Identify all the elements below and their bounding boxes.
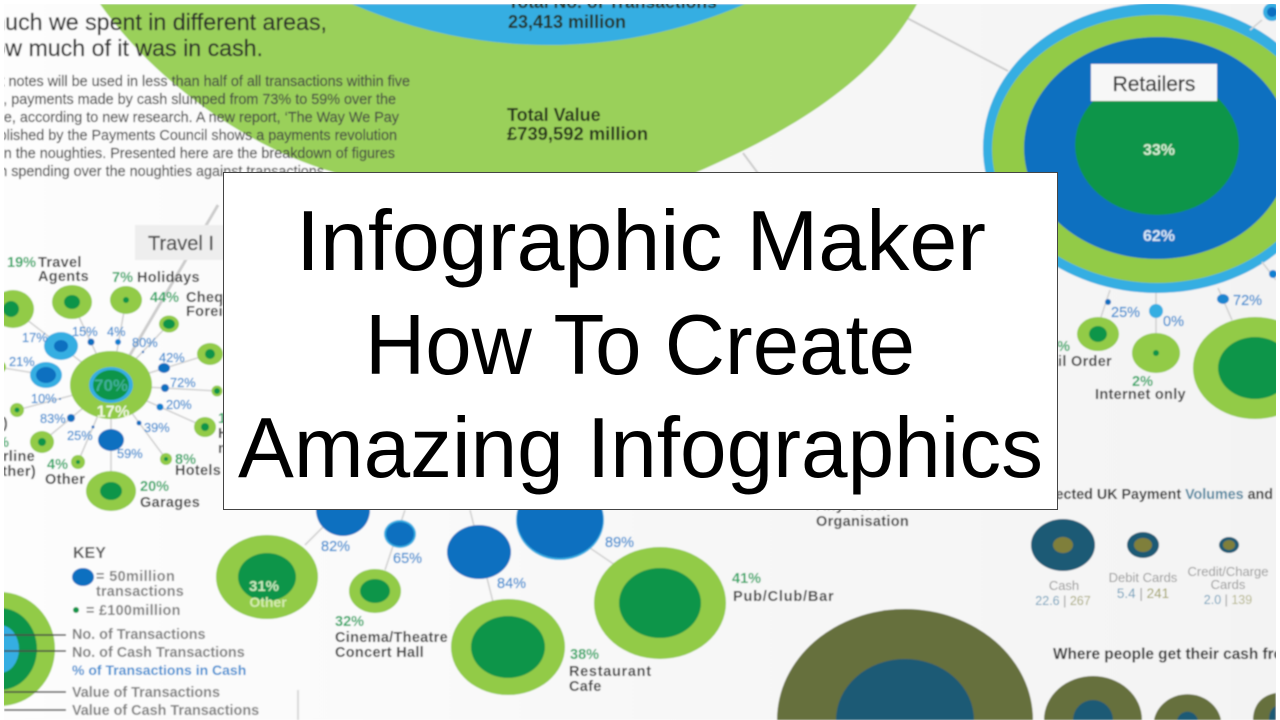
travel cluster labels: 44% xyxy=(150,290,179,306)
payment volumes panel: Debit Cards xyxy=(1109,570,1178,585)
large green circle with total figures xyxy=(100,4,1008,172)
travel cluster bubbles xyxy=(0,285,223,511)
article body text: on spending over the noughties against transactions. xyxy=(0,164,328,180)
other bubble: Other xyxy=(249,594,287,610)
retailer sub-bubbles: Internet only xyxy=(1095,387,1186,403)
retailer sub-bubbles: 0% xyxy=(1163,314,1184,330)
travel cluster labels: 21% xyxy=(9,354,35,369)
payment volumes panel: 22.6 | 267 xyxy=(1035,594,1091,608)
retailer sub-bubbles: 25% xyxy=(1111,305,1140,321)
other bubble xyxy=(216,535,318,619)
article heading xyxy=(4,12,326,58)
large green circle with total figures: Total Value xyxy=(507,105,601,125)
article body text: in the noughties. Presented here are the breakdown of figures xyxy=(1,146,395,162)
spending bubbles: Cinema/Theatre xyxy=(335,630,448,646)
travel cluster bubbles: 17% xyxy=(96,403,130,421)
other bubble: 31% xyxy=(249,578,279,595)
payment volumes panel: Credit/Charge xyxy=(1188,564,1268,579)
spending bubbles: 32% xyxy=(335,614,364,630)
travel cluster labels: 83% xyxy=(40,411,66,426)
article body text xyxy=(0,74,410,180)
travel cluster labels: Travel xyxy=(38,255,82,271)
payment volumes panel: Cash xyxy=(1049,578,1079,593)
travel cluster labels: Cheque xyxy=(186,290,241,306)
travel cluster labels: 19% xyxy=(7,255,36,271)
title line 3: Amazing Infographics xyxy=(238,401,1043,496)
travel cluster labels: 72% xyxy=(170,375,196,390)
travel cluster labels: 39% xyxy=(144,420,170,435)
spending bubbles: 84% xyxy=(497,576,526,592)
key: Value of Transactions xyxy=(72,685,220,701)
travel cluster labels: Foreign xyxy=(186,304,241,320)
travel cluster labels xyxy=(0,255,241,511)
retailer sub-bubbles: 19% xyxy=(1041,339,1070,355)
key: KEY xyxy=(73,545,106,562)
retailers bubble xyxy=(983,3,1280,293)
key: = £100million xyxy=(86,603,181,619)
travel cluster labels: 25% xyxy=(67,428,93,443)
payment volumes panel: Cards xyxy=(1211,577,1246,592)
spending bubbles: Restaurant xyxy=(569,664,652,680)
travel cluster labels: Agents xyxy=(38,269,89,285)
large olive value bubble xyxy=(777,609,1033,720)
large green circle with total figures: 23,413 million xyxy=(508,12,626,32)
travel cluster labels: 8% xyxy=(175,452,196,468)
payment volumes panel: 2.0 | 139 xyxy=(1204,593,1252,607)
travel cluster labels: 20% xyxy=(140,479,169,495)
retailers bubble: 33% xyxy=(1143,142,1175,159)
travel cluster labels: 1% xyxy=(218,411,239,427)
key: No. of Transactions xyxy=(72,627,206,643)
spending bubbles: 41% xyxy=(732,571,761,587)
key xyxy=(0,545,259,719)
travel cluster labels: 20% xyxy=(166,397,192,412)
travel cluster labels: Hotels xyxy=(175,463,221,479)
travel cluster labels: 10% xyxy=(31,391,57,406)
travel label xyxy=(130,205,225,355)
travel cluster labels: 80% xyxy=(132,335,158,350)
retailers bubble: 62% xyxy=(1143,228,1175,245)
key: transactions xyxy=(96,584,184,600)
spending bubbles: Organisation xyxy=(816,514,909,530)
payment volumes panel: Selected UK Payment Volumes and xyxy=(1034,487,1273,503)
spending bubbles: Any Other xyxy=(816,498,889,514)
spending bubbles: 82% xyxy=(321,539,350,555)
travel cluster labels: Garages xyxy=(140,495,200,511)
title line 2: How To Create xyxy=(365,298,915,393)
travel cluster labels: 59% xyxy=(117,446,143,461)
spending bubbles: 65% xyxy=(393,551,422,567)
spending bubbles xyxy=(315,510,909,696)
lower connector lines xyxy=(298,510,615,720)
key: = 50million xyxy=(96,569,175,585)
retailer sub-bubbles: 72% xyxy=(1233,293,1262,309)
travel cluster labels: 17% xyxy=(22,330,48,345)
travel cluster labels: ) xyxy=(3,416,8,432)
travel cluster labels: 4% xyxy=(107,324,126,339)
retailer sub-bubbles: 2% xyxy=(1132,374,1153,390)
travel cluster labels: H xyxy=(218,426,229,442)
large green circle with total figures: £739,592 million xyxy=(507,123,648,144)
travel cluster labels: Other xyxy=(45,472,85,488)
key: % of Transactions in Cash xyxy=(72,662,246,678)
travel cluster labels: 4% xyxy=(47,457,68,473)
spending bubbles: Concert Hall xyxy=(335,645,424,661)
travel label: Travel I xyxy=(148,233,214,255)
retailer sub-bubbles xyxy=(1058,4,1276,420)
travel cluster labels: m xyxy=(218,441,231,457)
travel cluster connector lines xyxy=(5,313,212,472)
travel cluster labels: 15% xyxy=(72,324,98,339)
title line 1: Infographic Maker xyxy=(296,194,986,289)
spending bubbles: 38% xyxy=(570,647,599,663)
travel cluster bubbles: 70% xyxy=(94,376,128,395)
spending bubbles: Pub/Club/Bar xyxy=(733,589,834,605)
travel cluster labels: 7% xyxy=(112,270,133,286)
travel cluster labels: 42% xyxy=(159,350,185,365)
key: No. of Cash Transactions xyxy=(72,645,245,661)
travel cluster labels: Holidays xyxy=(137,270,200,286)
where people get their cash panel xyxy=(1044,646,1280,720)
retailer sub-bubbles: Mail Order xyxy=(1037,354,1112,370)
spending bubbles: Cafe xyxy=(569,679,602,695)
spending bubbles: 89% xyxy=(605,535,634,551)
title box xyxy=(224,172,1058,510)
payment volumes panel xyxy=(1031,487,1273,608)
key: Value of Cash Transactions xyxy=(72,703,259,719)
payment volumes panel: 5.4 | 241 xyxy=(1117,586,1169,601)
retailers bubble: Retailers xyxy=(1113,73,1195,96)
